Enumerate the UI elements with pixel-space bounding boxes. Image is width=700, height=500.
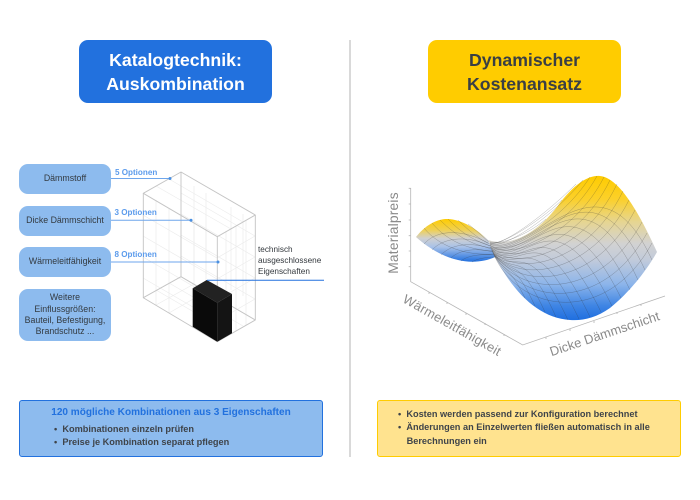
option count 8: 8 Optionen	[114, 250, 157, 259]
title: Dynamischer Kostenansatz: Dynamischer	[469, 50, 580, 70]
black block	[193, 280, 232, 342]
label: Weitere Einflussgrößen: Weitere	[50, 292, 80, 302]
option count 5: 5 Optionen	[115, 168, 157, 176]
summary bullets: • Kombinationen einzeln prüfen	[54, 424, 194, 434]
label: Dämmstoff: Dämmstoff	[44, 173, 86, 183]
summary bullets: • Änderungen an Einzelwerten fließen automatisch in alle	[398, 422, 650, 432]
axis label: Wärmeleitfähigkeit: Wärmeleitfähigkeit	[400, 291, 504, 359]
summary bullets: Berechnungen ein	[407, 436, 487, 446]
annotation: technisch ausgeschlossene Eigenschaften: technisch	[258, 245, 293, 254]
label: Weitere Einflussgrößen: Bauteil, Befestigung,	[25, 315, 105, 325]
label: Weitere Einflussgrößen: Brandschutz ...	[36, 326, 94, 336]
summary heading: 120 mögliche Kombinationen aus 3 Eigenschaften	[51, 406, 291, 418]
title: Dynamischer Kostenansatz: Kostenansatz	[467, 74, 582, 94]
label: Wärmeleitfähigkeit: Wärmeleitfähigkeit	[29, 256, 101, 266]
connector lines	[111, 177, 324, 281]
panel: right summary	[377, 400, 681, 457]
chart axes	[409, 188, 665, 345]
title: Dynamischer Kostenansatz	[428, 40, 621, 103]
cube wireframe with black block	[142, 172, 256, 342]
title: Katalogtechnik: Katalogtechnik:	[109, 50, 242, 70]
summary bullets: • Kosten werden passend zur Konfiguration berechnet	[398, 409, 638, 419]
summary bullets: • Preise je Kombination separat pflegen	[54, 437, 229, 447]
surface: main	[488, 176, 657, 320]
option count 3: 3 Optionen	[114, 208, 157, 217]
title: Katalogtechnik	[79, 40, 272, 103]
label: Weitere Einflussgrößen: Einflussgrößen:	[34, 304, 96, 314]
summary bullets	[398, 409, 650, 446]
summary bullets	[54, 424, 229, 447]
axis label: Dicke Dämmschicht: Dicke Dämmschicht	[548, 308, 662, 359]
label: Weitere Einflussgrößen	[19, 289, 111, 341]
annotation: technisch ausgeschlossene Eigenschaften	[258, 245, 321, 276]
surface: far fold	[416, 219, 495, 262]
label: Dicke Dämmschicht	[19, 206, 111, 236]
axis label: Materialpreis: Materialpreis	[386, 192, 401, 274]
title: Katalogtechnik: Auskombination	[106, 74, 245, 94]
panel: left summary	[19, 400, 323, 457]
annotation: technisch ausgeschlossene Eigenschaften: Eigenschaften	[258, 267, 310, 276]
label: Dämmstoff	[19, 164, 111, 194]
divider	[349, 40, 351, 457]
label: Dicke Dämmschicht: Dicke Dämmschicht	[26, 215, 104, 225]
annotation: technisch ausgeschlossene Eigenschaften: ausgeschlossene	[258, 256, 321, 265]
label: Wärmeleitfähigkeit	[19, 247, 111, 277]
